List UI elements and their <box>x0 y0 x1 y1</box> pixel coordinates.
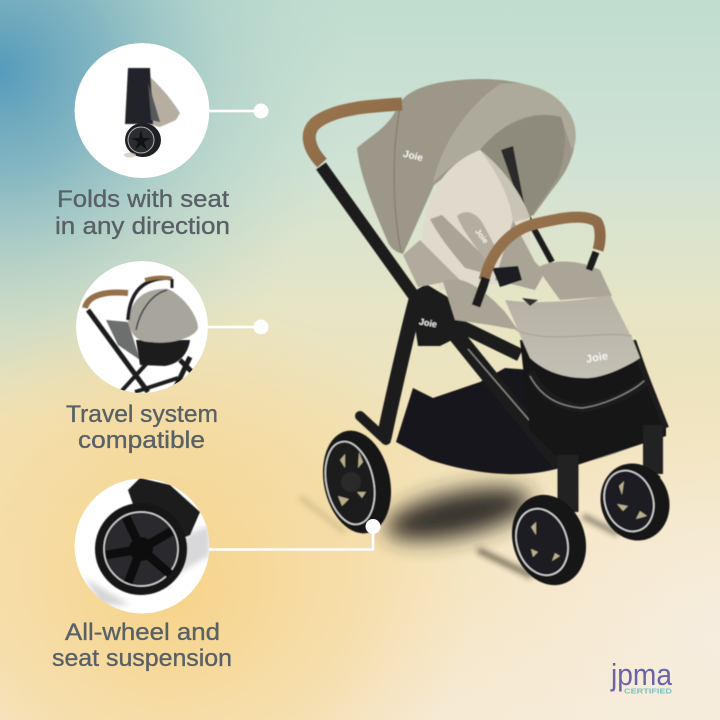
feature 2 circle photo <box>76 261 208 395</box>
feature 2 caption: compatible <box>78 427 205 454</box>
seat logo: Joie <box>585 350 609 366</box>
feature 1 connector <box>209 104 268 118</box>
canopy <box>357 79 576 254</box>
canopy logo: Joie <box>402 149 424 164</box>
footrest tray <box>520 340 666 468</box>
feature 1 circle photo <box>74 43 210 178</box>
feature 3 caption: seat suspension <box>52 645 232 672</box>
wheel: front left <box>501 485 597 595</box>
rear handle <box>309 104 402 163</box>
feature 3: suspension <box>52 478 380 672</box>
feature 3 circle photo <box>74 478 210 614</box>
feature 1 caption: in any direction <box>55 213 230 240</box>
wheel: front right <box>591 454 679 550</box>
rear brake pedal <box>360 416 386 440</box>
ground shadows <box>300 477 618 576</box>
front bumper bar <box>476 217 600 306</box>
feature 1: folds <box>55 43 268 240</box>
jpma certified logo: CERTIFIED <box>624 686 673 696</box>
feature 2 connector <box>208 320 268 334</box>
jpma certified logo: jpma <box>610 657 673 692</box>
feature 3 caption: All-wheel and <box>65 619 220 646</box>
seat back <box>403 150 545 300</box>
feature 3 connector <box>209 519 380 550</box>
wheel: rear <box>314 424 400 540</box>
feature 2: travel system <box>66 261 268 454</box>
feature 2 caption: Travel system <box>66 401 218 428</box>
harness pads <box>430 212 522 287</box>
feature 1 caption: Folds with seat <box>57 186 229 213</box>
harness pads: Joie <box>473 227 490 246</box>
stroller product image <box>300 79 679 595</box>
front wheel forks <box>535 425 655 548</box>
basket <box>396 368 664 474</box>
frame <box>321 166 664 464</box>
seat cushion <box>443 262 640 378</box>
hub logo: Joie <box>418 317 438 329</box>
